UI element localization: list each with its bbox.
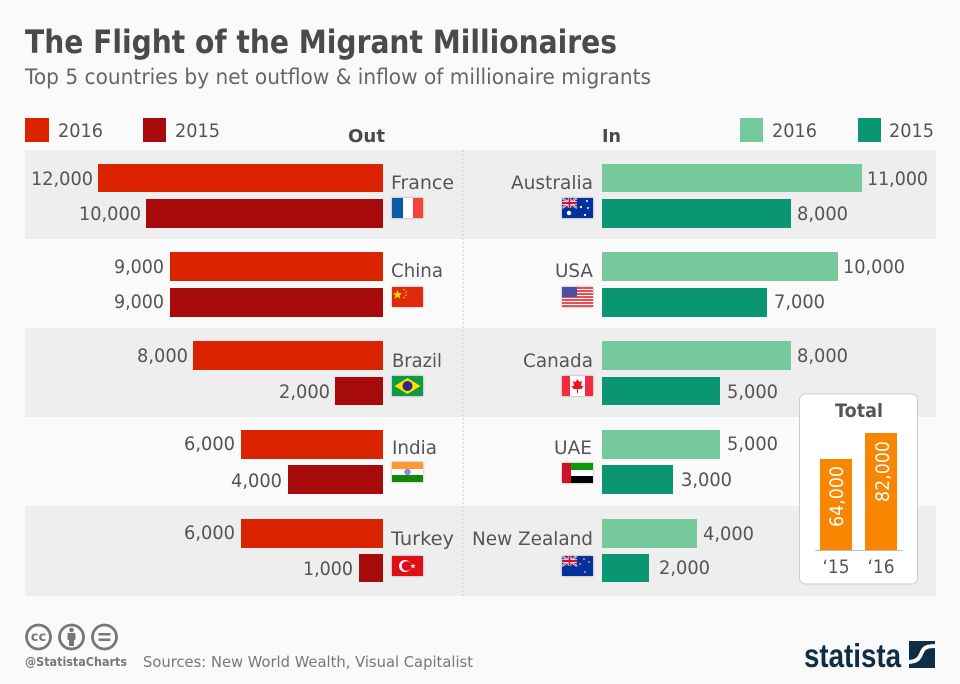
row: India out: 4,000 — [231, 470, 282, 492]
legend: in: 2016 — [772, 120, 817, 142]
row: Brazil out: 2,000 — [279, 381, 330, 403]
row: France out: France — [391, 172, 454, 194]
row: UAE in: UAE — [554, 437, 592, 459]
row: Brazil out: Brazil — [392, 350, 442, 372]
legend: in: 2015 — [889, 120, 934, 142]
row: USA in — [555, 252, 905, 317]
bar: 2015 total: 64,000 — [826, 466, 848, 527]
row: UAE in: 5,000 — [727, 433, 778, 455]
row: India out: India — [392, 437, 437, 459]
row: USA in: 10,000 — [843, 256, 905, 278]
bar: 2016 total: 82,000 — [872, 441, 894, 502]
panel: in chart — [472, 164, 928, 582]
row: Canada in: Canada — [523, 350, 593, 372]
row: Canada in: 5,000 — [727, 381, 778, 403]
row: India out: 6,000 — [184, 433, 235, 455]
legend: out: 2016 — [58, 120, 103, 142]
legend: out: 2015 — [175, 120, 220, 142]
inset heading: Total — [835, 400, 883, 422]
bar: 2016 total — [865, 433, 897, 550]
row: China out: 9,000 — [114, 291, 164, 313]
row: Turkey out: Turkey — [390, 528, 454, 550]
axis labels: ‘16 — [868, 556, 894, 578]
row: New Zealand in: 2,000 — [659, 557, 710, 579]
row: Turkey out: 1,000 — [303, 558, 353, 580]
row: USA in: USA — [555, 260, 593, 282]
row: Brazil out: 8,000 — [137, 345, 188, 367]
icon: creative commons licence — [26, 625, 116, 649]
row: UAE in — [554, 430, 778, 494]
heading: in: In — [602, 126, 621, 147]
row: Turkey out — [184, 519, 454, 582]
axis labels: ‘15 — [822, 556, 850, 578]
bar: 2015 total — [820, 459, 852, 550]
logo: statista: statista — [804, 637, 902, 674]
axis labels — [822, 556, 894, 578]
row: New Zealand in: New Zealand — [472, 528, 593, 550]
legend: in — [740, 118, 934, 142]
row: UAE in: 3,000 — [681, 469, 732, 491]
row: Brazil out — [137, 341, 442, 405]
row: France out: 12,000 — [31, 168, 93, 190]
row: New Zealand in — [472, 519, 754, 582]
row: China out: China — [391, 260, 443, 282]
row: Canada in: 8,000 — [797, 345, 848, 367]
row: USA in: 7,000 — [774, 291, 825, 313]
sources: Sources: New World Wealth, Visual Capitalist — [143, 653, 473, 671]
title: The Flight of the Migrant Millionaires — [25, 23, 617, 61]
row: Australia in: Australia — [511, 172, 593, 194]
row: France out — [31, 164, 454, 228]
row: Turkey out: 6,000 — [184, 522, 235, 544]
row: India out — [184, 430, 437, 494]
row: New Zealand in: 4,000 — [703, 523, 754, 545]
row: Canada in — [523, 341, 848, 405]
panel: total inset — [800, 394, 918, 584]
subtitle: Top 5 countries by net outflow & inflow of millionaire migrants — [24, 65, 651, 89]
heading: out: Out — [348, 126, 385, 147]
row: Australia in: 8,000 — [797, 203, 848, 225]
row: China out — [114, 252, 443, 317]
row: France out: 10,000 — [79, 203, 141, 225]
row: Australia in — [511, 164, 928, 228]
row: China out: 9,000 — [114, 256, 164, 278]
icon: creative commons licence: cc — [31, 630, 46, 645]
row: Australia in: 11,000 — [867, 168, 928, 190]
credit handle: @StatistaCharts — [25, 655, 127, 669]
legend: out — [25, 118, 220, 142]
panel: out chart — [31, 164, 454, 582]
